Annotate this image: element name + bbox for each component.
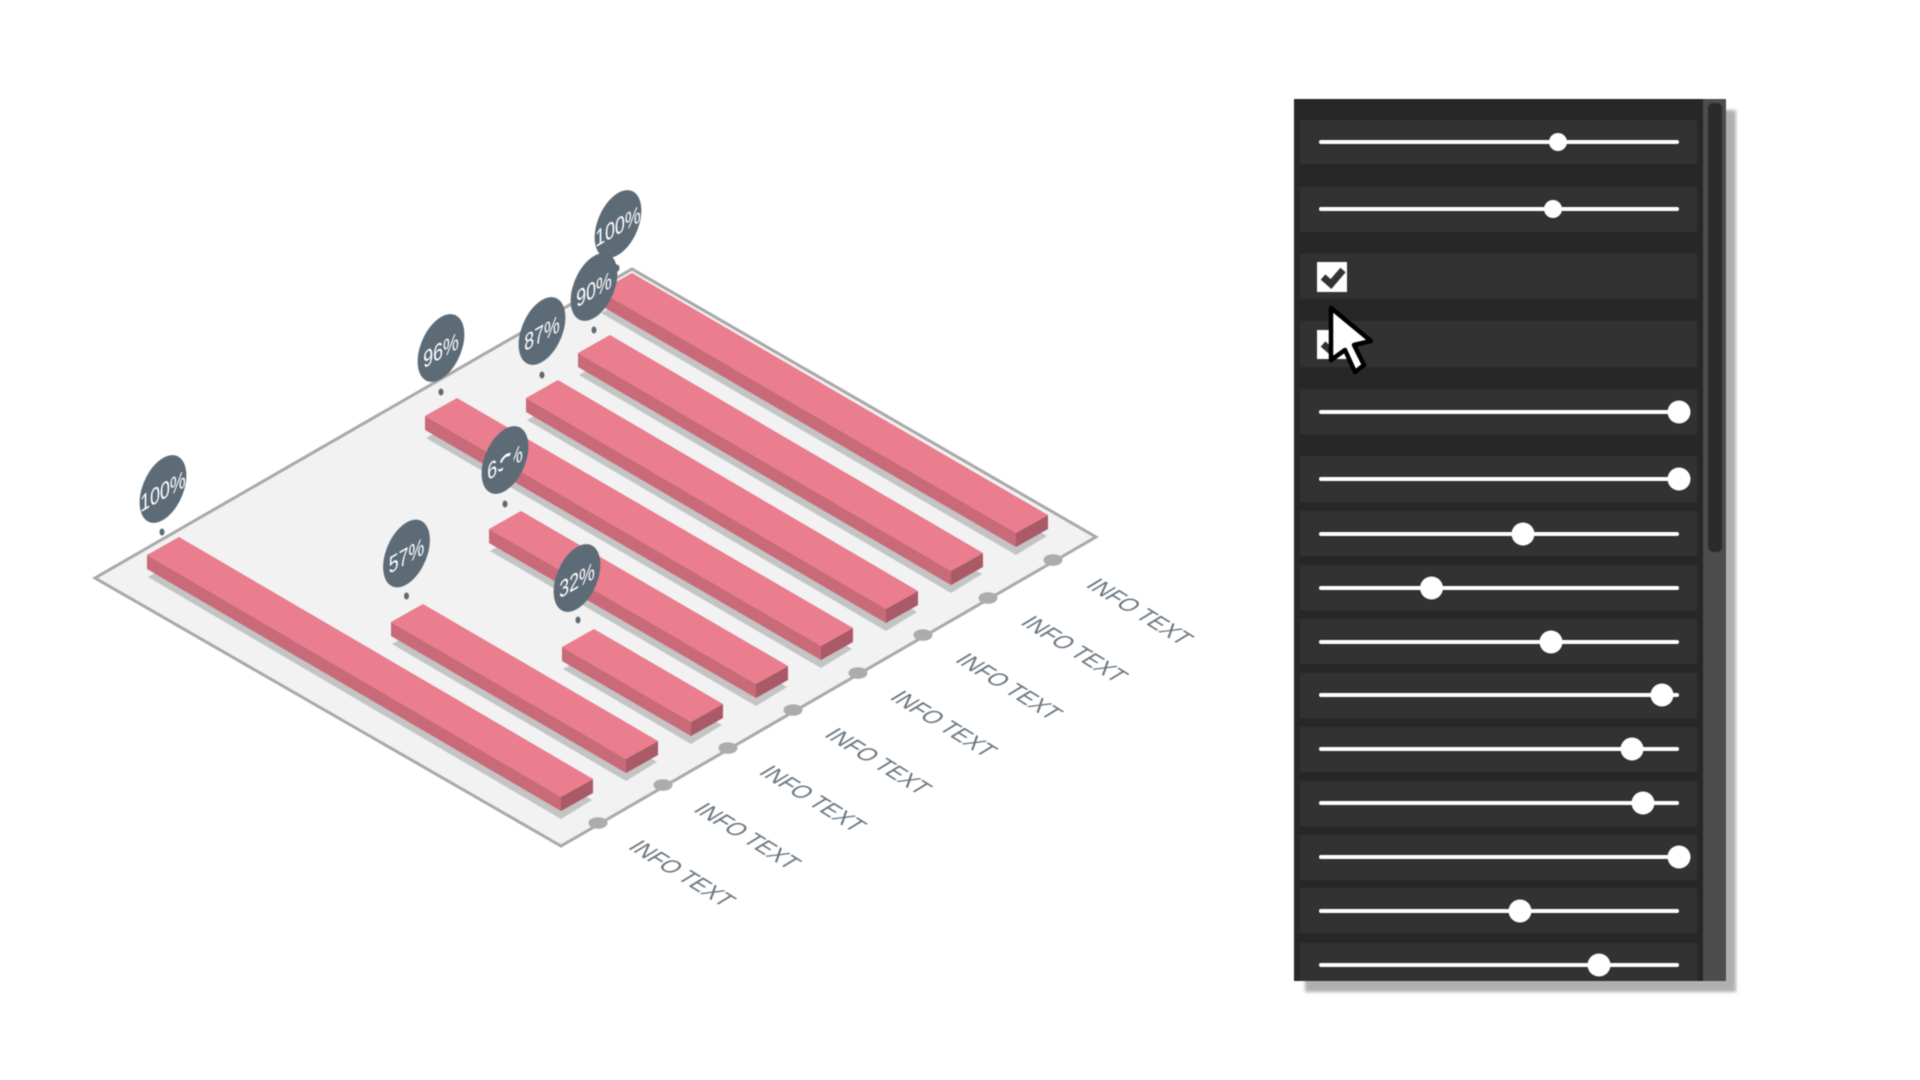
axis labels: INFO TEXT: [753, 762, 873, 835]
slider 14: [1319, 900, 1679, 922]
bubble: 63% partly hidden: 63%: [487, 439, 523, 486]
bar 7: 90%: [578, 335, 983, 593]
mouse cursor: [1331, 308, 1371, 372]
axis labels: INFO TEXT: [884, 687, 1004, 761]
bar 3: 32%: [562, 629, 723, 744]
bar 2: 57%: [391, 604, 658, 781]
axis labels: [622, 575, 1200, 910]
bar 4: 63%: [489, 511, 788, 706]
bubble: 32%: [554, 533, 600, 623]
slider 11: [1319, 738, 1679, 760]
chart base plate: [95, 269, 1096, 846]
slider 12: [1319, 792, 1679, 814]
bar 5: 96%: [425, 398, 853, 668]
scrollbar: [1703, 99, 1726, 981]
bubble anchor dots: [160, 264, 620, 624]
bar 1: 100%: [147, 537, 593, 819]
bubble: 100% back: [595, 179, 641, 269]
slider 6: [1319, 468, 1690, 490]
bubble: 57%: [383, 509, 430, 598]
axis labels: INFO TEXT: [819, 724, 938, 798]
bubble: 87%: [519, 286, 565, 376]
axis labels: INFO TEXT: [949, 649, 1069, 723]
slider 2: [1319, 200, 1679, 218]
slider 15: [1319, 954, 1679, 976]
bubble: 87%: 87%: [524, 310, 560, 357]
axis labels: INFO TEXT: [1080, 575, 1200, 648]
checkbox 1: [1317, 262, 1347, 292]
slider 5: [1319, 400, 1690, 424]
bubble: 90%: [571, 242, 617, 332]
slider 13: [1319, 846, 1690, 868]
bubble: 90%: 90%: [576, 266, 612, 313]
bubble: 63% partly hidden: [482, 415, 528, 505]
slider 7: [1319, 522, 1679, 546]
bubble: 32%: 32%: [559, 557, 595, 604]
row backgrounds: [1300, 120, 1697, 981]
slider 8: [1319, 576, 1679, 600]
bubble: 100% back: 100%: [595, 200, 641, 253]
isometric chart: [95, 179, 1200, 910]
slider 9: [1319, 630, 1679, 654]
bar 6: 87%: [526, 380, 918, 631]
bubble: 57%: 57%: [389, 532, 424, 579]
bubble: 96%: 96%: [423, 327, 459, 374]
bubble: 100% front: 100%: [140, 465, 186, 518]
settings panel: [1294, 99, 1736, 992]
checkbox 2: [1317, 330, 1347, 359]
axis markers: [588, 554, 1062, 829]
bubble: 96%: [418, 303, 464, 393]
slider 10: [1319, 684, 1679, 706]
bar 8: 100%: [600, 273, 1048, 555]
panel background: [1294, 99, 1726, 981]
panel shadow: [1305, 110, 1736, 992]
axis labels: INFO TEXT: [622, 836, 742, 910]
axis labels: INFO TEXT: [1015, 612, 1134, 686]
axis labels: INFO TEXT: [688, 799, 807, 873]
slider 1: [1319, 133, 1679, 151]
bubble: 100% front: [140, 444, 186, 534]
